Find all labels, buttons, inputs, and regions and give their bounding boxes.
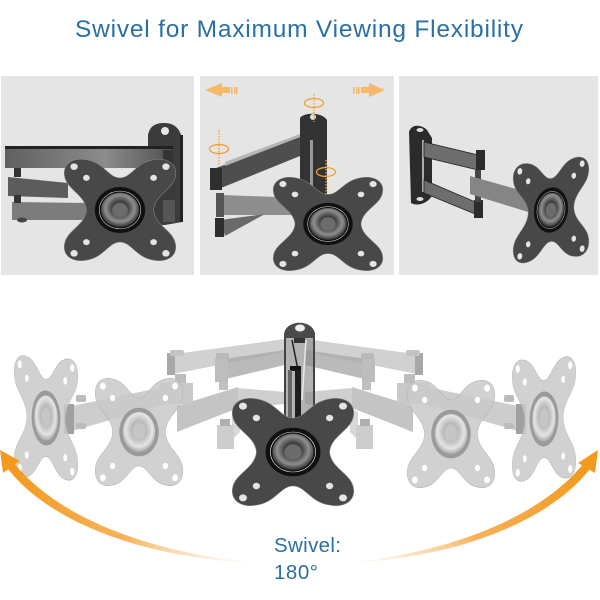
middle arm — [222, 195, 295, 215]
swivel diagram: ghost positions and centre mount — [14, 323, 576, 506]
swivel label: 180° — [274, 561, 318, 584]
mounting plate — [64, 159, 176, 261]
rotation marker: top pivot — [304, 94, 324, 122]
ghost plate: mid left — [95, 378, 183, 486]
swivel label: Swivel: — [274, 534, 341, 557]
lower arm — [424, 180, 480, 216]
wall plate — [300, 114, 327, 205]
lower arm — [220, 214, 265, 236]
wall plate — [409, 126, 432, 205]
mounting plate — [513, 156, 589, 264]
lower arm — [12, 202, 88, 220]
arrow: right — [353, 83, 385, 97]
arrow: left — [205, 83, 238, 97]
title: Swivel for Maximum Viewing Flexibility — [75, 16, 524, 43]
upper arm — [5, 147, 172, 168]
swivel arrow: right — [345, 450, 598, 563]
panel: centre mount photo with motion markers — [200, 76, 394, 275]
panel: left swing mount photo — [1, 76, 194, 275]
ghost plate: far left — [14, 355, 78, 481]
middle arm — [8, 177, 68, 198]
upper arm — [424, 142, 478, 170]
centre plate — [232, 398, 354, 506]
rotation marker: left pivot — [210, 130, 228, 165]
forearm — [470, 176, 528, 212]
swivel label — [274, 534, 341, 584]
centre wall bracket — [284, 323, 315, 423]
ghost arms: right — [305, 339, 526, 449]
mounting plate — [273, 177, 383, 271]
panel: right extended mount photo — [399, 76, 598, 275]
swivel arrow: left — [0, 450, 258, 563]
wall plate — [148, 123, 182, 225]
ghost arms: left — [64, 339, 285, 449]
ghost plate: far right — [512, 356, 576, 482]
rotation marker: lower pivot — [316, 160, 336, 195]
ghost plate: mid right — [407, 380, 495, 488]
upper arm — [216, 137, 300, 190]
